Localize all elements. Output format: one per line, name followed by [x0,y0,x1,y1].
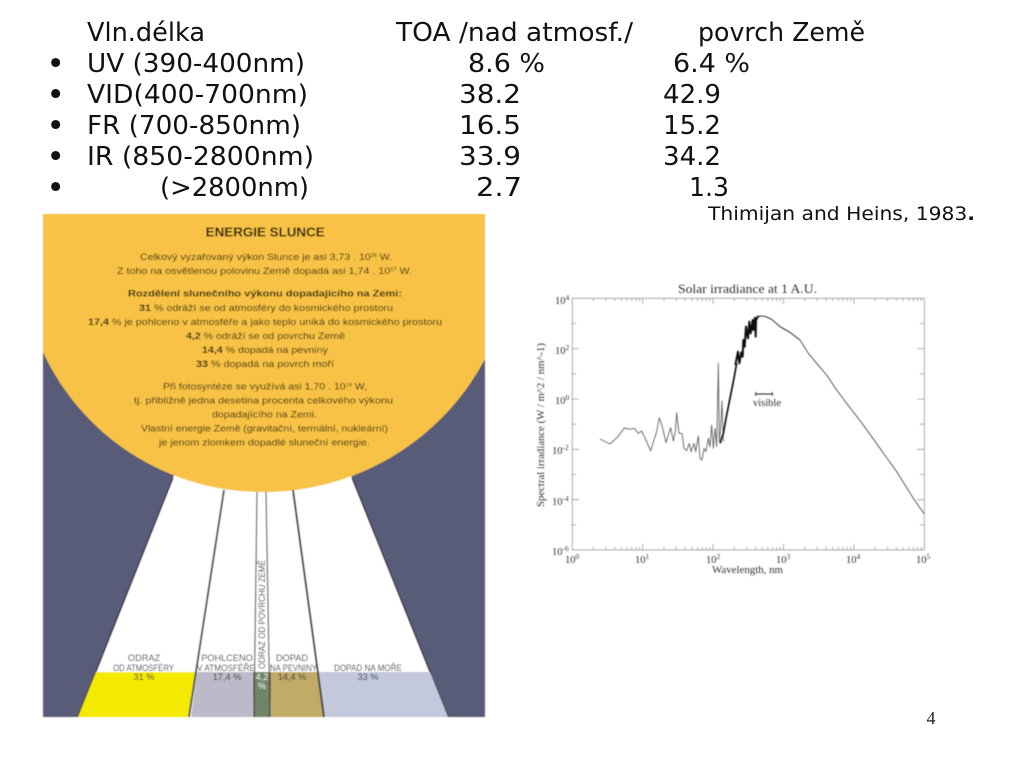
sun text: total output: Celkový vyzařovaný výkon Slunce je asi 3,73 . 10 [140,252,350,263]
colored band: land [270,672,323,717]
label: sea: DOPAD NA MOŘE [334,663,402,673]
x axis tick labels: 10 [846,555,856,566]
beam edges [78,478,448,717]
table header row: povrch Země [698,18,865,48]
sun text: total output: 17 [390,267,397,273]
plot frame [572,298,924,550]
y axis title: Spectral irradiance (W / m^2 / nm^-1) [536,342,547,507]
row: VID: 38.2 [459,80,521,110]
row: FR: 15.2 [663,111,721,141]
row: FR [46,108,721,144]
row: UV: • [46,46,65,82]
label: land: DOPAD [276,653,308,663]
sun text: photosynthesis: Vlastní energie Země (gravitační, termální, nukleární) [141,424,388,434]
label: absorbed in atmosphere [197,653,255,682]
panel: solar energy diagram [43,214,485,717]
sun text: distribution: 14,4 % dopadá na pevniny [202,345,328,356]
page number: 4 [926,708,936,728]
y axis tick labels: 10 [555,396,566,407]
label: reflection from atmosphere [113,653,174,682]
y axis tick labels: 10 [552,497,562,508]
x axis tick labels: 2 [716,552,720,561]
row: FR: FR (700-850nm) [87,111,301,141]
label: 4,2 percent [256,672,268,691]
sun text: distribution: Rozdělení slunečního výkonu dopadajícího na Zemi: [128,288,402,300]
sun text: photosynthesis: tj. přibližně jedna desetina procenta celkového výkonu [134,396,393,406]
row: IR [46,139,721,175]
row: VID: VID(400-700nm) [87,80,308,110]
y axis tick labels: -6 [562,544,569,553]
y axis tick labels: -2 [562,443,569,452]
data table: wavelength bands [46,18,865,206]
label: reflection from surface (vertical): ODRAZ OD POVRCHU ZEMĚ [257,560,267,669]
sun text: total output [117,252,412,277]
visible range marker: visible [753,398,781,409]
row: FR: • [46,108,65,144]
x axis tick labels: 10 [635,555,646,566]
colored band: reflection from surface [254,672,270,717]
x axis tick labels: 10 [565,555,576,566]
label: 4,2 percent: 4,2 [256,672,268,682]
sun text: total output: 26 [371,253,377,259]
x axis tick labels: 10 [916,555,926,566]
sun text: total output: Z toho na osvětlenou polovinu Země dopadá asi 1,74 . 10 [117,266,362,277]
row: IR: IR (850-2800nm) [87,142,314,172]
y axis tick labels [552,293,570,558]
sun text: distribution: 4,2 % odráží se od povrchu Země [186,331,345,342]
label: reflection from atmosphere: OD ATMOSFÉRY [113,663,174,673]
white beam [78,470,448,717]
x axis tick labels: 1 [646,552,650,561]
citation: Thimijan and Heins, 1983 . [707,203,975,225]
x axis tick labels [565,552,930,566]
sun text: photosynthesis: Při fotosyntéze se využívá asi 1,70 . 10 [163,382,329,392]
row: IR: 33.9 [459,142,521,172]
label: reflection from atmosphere: 31 % [134,672,154,682]
y axis tick labels: 10 [555,346,566,357]
y axis tick labels: -4 [562,494,569,503]
sun text: total output: W. [397,266,412,277]
label: land: 14,4 % [278,672,306,682]
sun text: photosynthesis: dopadajícího na Zemi. [212,410,317,420]
row: VID [46,77,721,113]
sun text: distribution [88,288,442,370]
y axis tick labels: 0 [566,393,570,402]
colored band: sea [319,672,448,717]
chart: solar irradiance [536,281,930,576]
label: land [270,653,317,682]
x axis tick labels: 3 [786,552,790,561]
label: absorbed in atmosphere: 17,4 % [213,672,241,682]
sun text: photosynthesis: W, [352,382,367,392]
x axis tick labels: 0 [576,552,580,561]
x axis title: Wavelength, nm [712,565,783,576]
sun text: distribution: 17,4 % je pohlceno v atmosféře a jako teplo uniká do kosmického prostoru [88,317,442,328]
row: IR: • [46,139,65,175]
axis ticks [572,298,924,550]
sun disc [43,214,485,492]
colored band: absorbed in atmosphere [191,672,254,717]
x axis tick labels: 4 [856,552,860,561]
row: UV: 6.4 % [673,49,750,79]
row: VID: • [46,77,65,113]
sun title: ENERGIE SLUNCE [206,224,325,240]
y axis tick labels: 10 [555,296,566,307]
y axis tick labels: 10 [552,547,562,558]
sun text: photosynthesis: je jenom zlomkem dopadlé sluneční energie. [158,438,370,448]
label: sea [334,663,402,682]
x axis tick labels: 5 [926,552,930,561]
row: above 2800 nm: • [46,170,65,206]
table header row [87,18,865,48]
x axis tick labels: 10 [706,555,716,566]
row: FR: 16.5 [459,111,521,141]
row: UV [46,46,750,82]
background [43,214,485,717]
sun text: distribution: 33 % dopadá na povrch moří [196,359,334,370]
row: above 2800 nm [46,170,729,206]
label: reflection from atmosphere: ODRAZ [128,653,160,663]
x axis tick labels: 10 [776,555,786,566]
table header row: TOA /nad atmosf./ [395,18,633,48]
chart title: Solar irradiance at 1 A.U. [678,281,817,296]
sun text: total output: W. [377,252,392,263]
y axis tick labels: 10 [552,446,562,457]
sun text: photosynthesis: 14 [346,382,352,388]
label: absorbed in atmosphere: POHLCENO [201,653,253,663]
label: land: NA PEVNINY [270,663,317,673]
y axis tick labels: 2 [566,343,570,352]
label: sea: 33 % [358,672,378,682]
row: above 2800 nm: (>2800nm) [160,173,309,203]
visible range marker [753,392,781,409]
row: UV: UV (390-400nm) [87,49,305,79]
beam dividers [189,490,324,717]
row: IR: 34.2 [663,142,721,172]
sun text: distribution: 31 % odráží se od atmosféry do kosmického prostoru [139,303,393,314]
row: UV: 8.6 % [468,49,545,79]
sun text: photosynthesis [134,382,393,448]
row: VID: 42.9 [663,80,721,110]
label: 4,2 percent: % [258,681,266,691]
row: above 2800 nm: 1.3 [689,173,729,203]
table header row: Vln.délka [87,18,205,48]
label: absorbed in atmosphere: V ATMOSFÉŘE [197,663,255,673]
irradiance curve [600,316,924,514]
row: above 2800 nm: 2.7 [476,173,522,203]
y axis tick labels: 4 [566,293,570,302]
colored band: reflection from atmosphere [78,672,196,717]
